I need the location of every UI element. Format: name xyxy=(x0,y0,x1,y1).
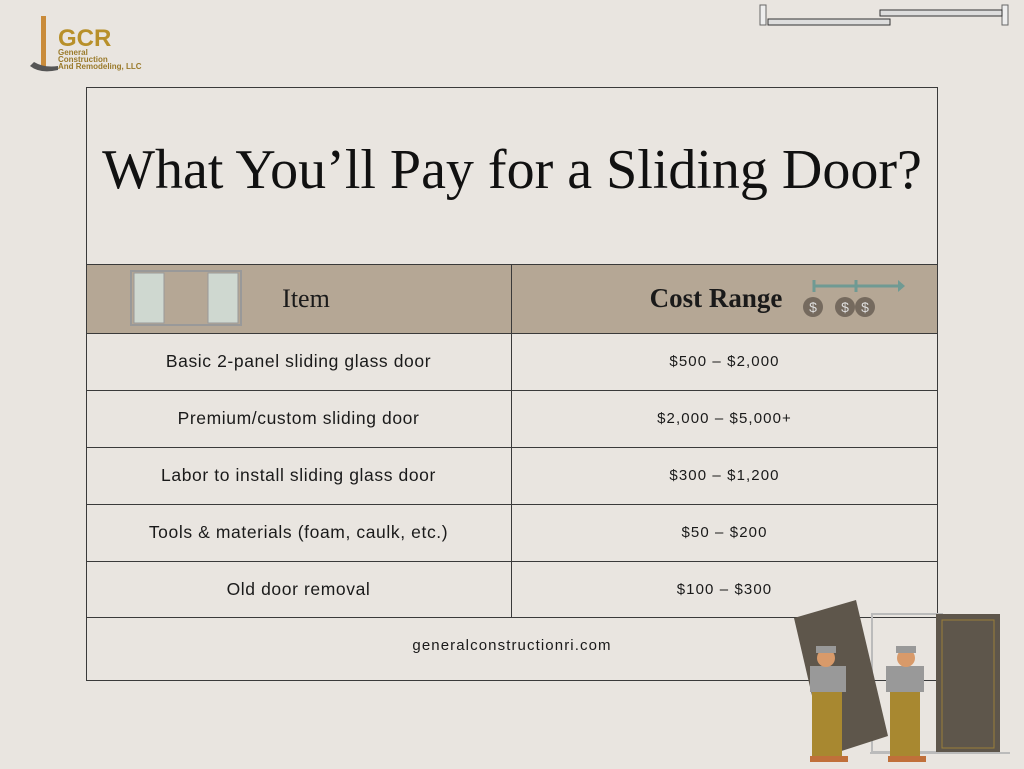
text: Tools & materials (foam, caulk, etc.) xyxy=(149,522,448,542)
icon: sliding rails xyxy=(760,4,1008,26)
illustration: workers carrying door xyxy=(794,600,1010,762)
footer url: generalconstructionri.com xyxy=(412,636,612,654)
logo: General xyxy=(58,48,88,57)
table xyxy=(86,87,938,681)
icon: money arrow: $ xyxy=(809,299,817,315)
text: Labor to install sliding glass door xyxy=(161,465,436,485)
header row background xyxy=(87,265,937,334)
text: $100 – $300 xyxy=(677,580,772,598)
icon: sliding door xyxy=(130,270,242,326)
text: $300 – $1,200 xyxy=(669,467,780,484)
logo: And Remodeling, LLC xyxy=(58,62,142,71)
text: Old door removal xyxy=(227,578,370,598)
text: $2,000 – $5,000+ xyxy=(657,410,792,427)
logo: Construction xyxy=(58,55,108,64)
icon: money arrow: $ xyxy=(841,299,849,315)
title: What You’ll Pay for a Sliding Door? xyxy=(102,139,922,201)
text: Premium/custom sliding door xyxy=(178,408,419,428)
logo xyxy=(30,16,142,72)
header: Item: Item xyxy=(282,284,330,312)
text: $500 – $2,000 xyxy=(669,353,780,370)
logo: GCR xyxy=(58,25,111,52)
icon: money arrow xyxy=(803,280,905,317)
header: Cost Range: Cost Range xyxy=(650,283,782,313)
icon: money arrow: $ xyxy=(861,299,869,315)
rows: Basic 2-panel sliding glass door xyxy=(166,351,431,371)
text: $50 – $200 xyxy=(681,524,768,541)
